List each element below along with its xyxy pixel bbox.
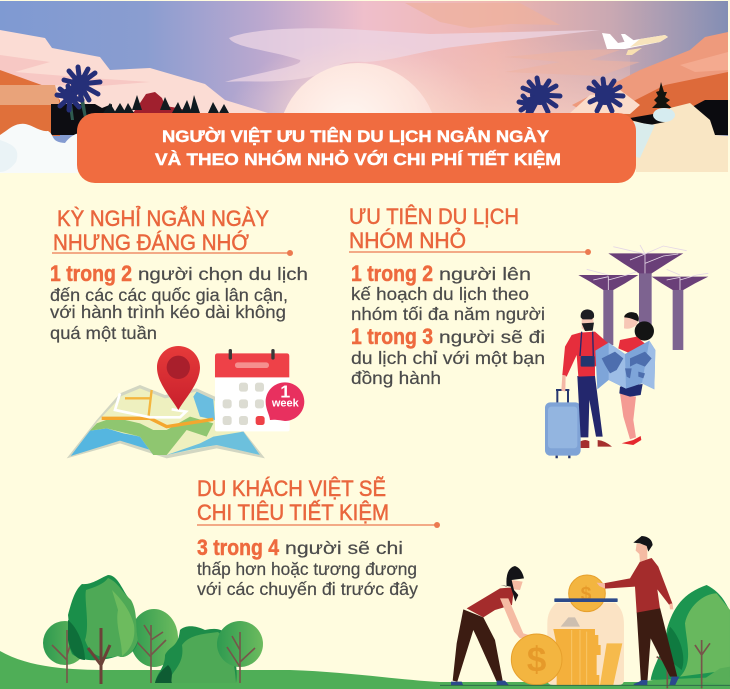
woman pushing coin (451, 566, 533, 686)
1 week bubble: 1 (280, 382, 290, 402)
section: small groups: du lịch chỉ với một bạn (351, 348, 545, 368)
large coin: $ (527, 641, 546, 680)
section: short trips: người chọn du lịch (138, 264, 308, 284)
woman (618, 312, 654, 445)
section: saving travellers: thấp hơn hoặc tương đương (197, 559, 417, 579)
heading: ƯU TIÊN DU LỊCH (349, 204, 519, 229)
left orange mountain (0, 70, 60, 136)
section: small groups: người sẽ đi (439, 327, 545, 347)
airplane (602, 33, 668, 55)
section: small groups: người lên (439, 264, 531, 284)
bush (155, 626, 237, 683)
clouds left (0, 124, 82, 173)
man with coin (597, 536, 679, 686)
body text: 3 trong 4 (197, 535, 280, 560)
pine right (652, 82, 672, 108)
ground line (440, 684, 730, 687)
round tree (217, 621, 263, 683)
1 week bubble (266, 382, 304, 421)
trees left (43, 575, 263, 684)
illustration: saving coins (440, 536, 730, 688)
sky (0, 1, 728, 157)
man (561, 309, 612, 448)
section: short trips (50, 206, 308, 343)
bush right (651, 585, 730, 688)
section: small groups: kế hoạch du lịch theo (351, 284, 529, 304)
left pink mountains (0, 30, 268, 113)
calendar (215, 349, 290, 431)
large coin (511, 634, 562, 685)
round tree (43, 621, 87, 683)
tree line left (51, 104, 230, 135)
section: short trips: quá một tuần (50, 323, 157, 343)
sky clouds (225, 3, 640, 82)
jar lid (554, 598, 618, 602)
supertrees (578, 245, 708, 350)
heading: DU KHÁCH VIỆT SẼ (197, 476, 386, 501)
palm trees left (57, 67, 100, 120)
sun with glow (246, 62, 441, 113)
right orange mountain (572, 32, 728, 120)
section: short trips: với hành trình kéo dài không (50, 302, 286, 322)
jar (547, 603, 624, 685)
clouds right (630, 103, 728, 172)
right dark hills (630, 100, 728, 135)
body text: 1 trong 2 (351, 261, 433, 286)
section: small groups: NHÓM NHỎ (349, 228, 466, 253)
section: short trips: NHƯNG ĐÁNG NHỚ (53, 230, 249, 255)
pine trees (103, 95, 229, 113)
suitcase (545, 390, 581, 458)
warm horizon (380, 40, 630, 130)
palm trees right (519, 78, 623, 113)
title banner: VÀ THEO NHÓM NHỎ VỚI CHI PHÍ TIẾT KIỆM (155, 150, 561, 169)
illustration: travelling couple with supertrees (545, 245, 708, 458)
sunset header scene (0, 1, 728, 173)
section: small groups: 1 trong 3 (351, 324, 433, 349)
title banner (77, 113, 636, 183)
section: saving travellers (197, 476, 440, 599)
coin dropping (569, 575, 605, 612)
section: small groups (349, 204, 591, 388)
large tree (68, 575, 138, 684)
section: small groups: nhóm tối đa năm người (351, 304, 545, 324)
section: saving travellers: CHI TIÊU TIẾT KIỆM (197, 500, 389, 525)
section: saving travellers: người sẽ chi (285, 538, 403, 558)
location pin (157, 346, 200, 410)
folded map (67, 385, 265, 458)
title text: NGƯỜI VIỆT ƯU TIÊN DU LỊCH NGẮN NGÀY (162, 127, 550, 146)
icon: map, pin and calendar (67, 346, 304, 458)
ground (0, 651, 730, 689)
heading: KỲ NGHỈ NGẮN NGÀY (57, 206, 269, 231)
coin dropping: $ (581, 584, 592, 605)
section: saving travellers: với các chuyến đi trước đây (197, 579, 418, 599)
section: short trips: đến các các quốc gia lân cận, (50, 285, 288, 305)
body text: 1 trong 2 (50, 261, 132, 286)
rule (349, 251, 588, 253)
section: small groups: đồng hành (351, 368, 441, 388)
1 week bubble: week (271, 398, 300, 410)
round tree (130, 609, 178, 683)
rule (52, 252, 290, 254)
world map (595, 341, 655, 389)
rule (197, 524, 437, 526)
